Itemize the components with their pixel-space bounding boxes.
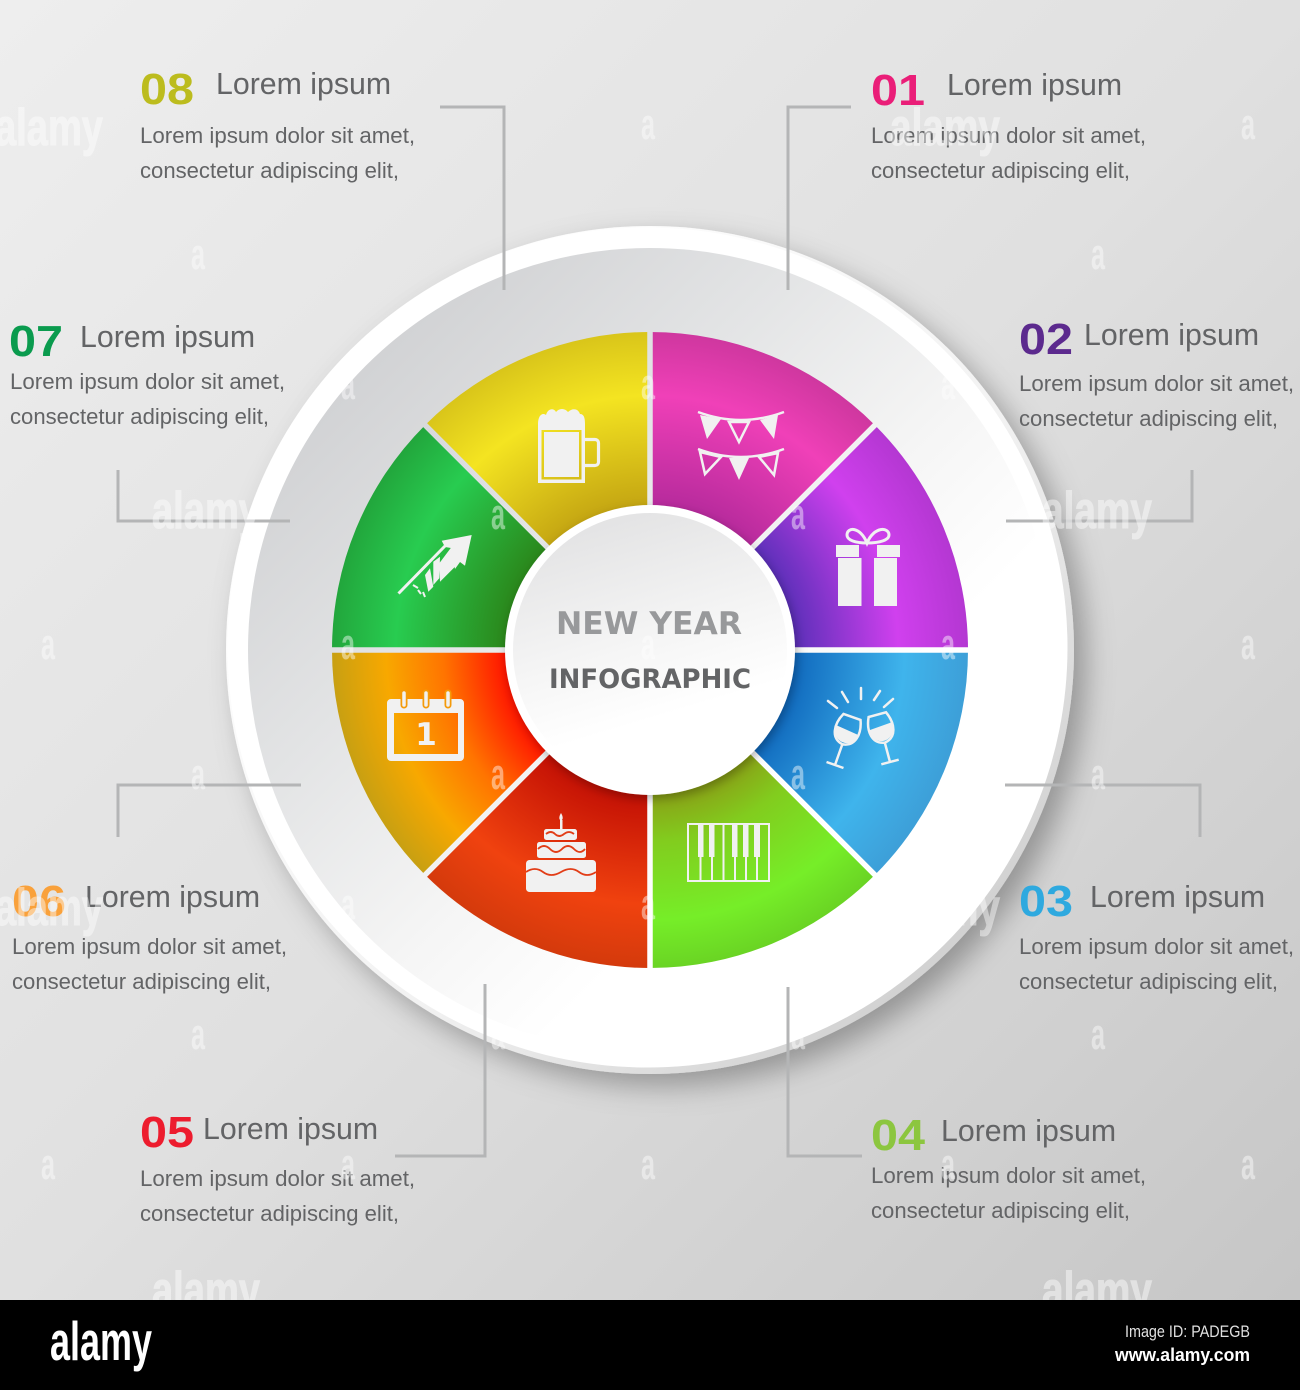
text block 08: Lorem ipsum dolor sit amet, (140, 123, 415, 148)
text block 01: 01 (871, 66, 925, 115)
text block 08: Lorem ipsum (216, 68, 391, 101)
icon: layered cake (526, 813, 596, 892)
watermarks: a (641, 880, 655, 929)
watermarks: a (191, 230, 205, 279)
text block 04: Lorem ipsum (941, 1115, 1116, 1148)
watermarks: a (1091, 750, 1105, 799)
segment 07 green (332, 427, 546, 648)
text block 06: Lorem ipsum (85, 881, 260, 914)
watermarks: alamy (890, 879, 1000, 937)
icon: wine glasses toasting (823, 688, 902, 769)
text block 02: Lorem ipsum dolor sit amet, (1019, 371, 1294, 396)
footer bar (0, 1300, 1300, 1390)
subtitle: INFOGRAPHIC (549, 664, 751, 695)
segment 03 blue (754, 652, 968, 873)
text block 07: 07 (9, 317, 63, 366)
icon: firework rocket (398, 535, 472, 597)
text block 05: Lorem ipsum (203, 1113, 378, 1146)
watermarks: alamy (890, 99, 1000, 157)
text block 04: Lorem ipsum dolor sit amet, (871, 1163, 1146, 1188)
text block 01 (871, 66, 1146, 183)
connector lines (118, 107, 1200, 1156)
segment 04 lime (652, 754, 873, 968)
text block 04 (871, 1111, 1146, 1223)
text block 05 (140, 1108, 415, 1226)
watermarks: alamy (152, 1262, 260, 1320)
watermarks: a (41, 620, 55, 669)
segment 05 red (425, 650, 650, 968)
centre hub (505, 505, 795, 795)
text block 03: consectetur adipiscing elit, (1019, 969, 1278, 994)
text block 07: Lorem ipsum dolor sit amet, (10, 369, 285, 394)
text block 08: consectetur adipiscing elit, (140, 158, 399, 183)
watermarks: a (1241, 620, 1255, 669)
text block 06 (12, 877, 287, 994)
icon: beer mug (538, 409, 598, 483)
icon: calendar: 1 (415, 717, 437, 753)
watermarks: a (1241, 100, 1255, 149)
text block 04: consectetur adipiscing elit, (871, 1198, 1130, 1223)
text block 03 (1019, 877, 1294, 994)
text block 05: consectetur adipiscing elit, (140, 1201, 399, 1226)
icon: piano keys (688, 824, 769, 881)
watermarks: a (41, 1140, 55, 1189)
text block 03: Lorem ipsum (1090, 881, 1265, 914)
text block 04: 04 (871, 1111, 926, 1160)
watermarks: a (491, 750, 505, 799)
text block 08 (140, 65, 415, 183)
text block 01: Lorem ipsum (947, 69, 1122, 102)
watermarks: a (941, 1140, 955, 1189)
watermarks: a (1091, 1010, 1105, 1059)
watermarks: a (191, 1010, 205, 1059)
white ring face (228, 228, 1068, 1068)
title: NEW YEAR (556, 606, 742, 642)
icon: bunting flags (698, 412, 784, 480)
footer logo: alamy (50, 1310, 152, 1372)
segment 06 orange (332, 652, 546, 873)
watermarks: a (1091, 230, 1105, 279)
watermarks: a (491, 1010, 505, 1059)
text block 02 (1019, 315, 1294, 431)
text block 08: 08 (140, 65, 194, 114)
text block 03: Lorem ipsum dolor sit amet, (1019, 934, 1294, 959)
text block 02: consectetur adipiscing elit, (1019, 406, 1278, 431)
website: www.alamy.com (1114, 1345, 1250, 1365)
text block 06: 06 (12, 877, 66, 926)
text block 05: 05 (140, 1108, 194, 1157)
text block 01: consectetur adipiscing elit, (871, 158, 1130, 183)
watermarks: a (641, 100, 655, 149)
text block 07 (9, 317, 285, 429)
watermarks: a (641, 360, 655, 409)
text block 01: Lorem ipsum dolor sit amet, (871, 123, 1146, 148)
segment 01 magenta (652, 332, 873, 546)
hub inner face (513, 513, 787, 787)
watermarks: a (791, 750, 805, 799)
watermarks: a (791, 490, 805, 539)
icon: gift box (836, 529, 900, 606)
watermarks: a (641, 620, 655, 669)
inner disc (248, 248, 1052, 1052)
wheel of eight segments (332, 332, 968, 968)
text block 07: consectetur adipiscing elit, (10, 404, 269, 429)
text block 06: Lorem ipsum dolor sit amet, (12, 934, 287, 959)
watermarks: a (1241, 1140, 1255, 1189)
watermarks: a (341, 620, 355, 669)
segment 08 yellow (427, 332, 648, 546)
text block 03: 03 (1019, 877, 1073, 926)
watermarks: a (491, 490, 505, 539)
icon: calendar (387, 693, 464, 761)
watermarks: alamy (1042, 1262, 1152, 1320)
text block 07: Lorem ipsum (80, 321, 255, 354)
watermarks: a (191, 750, 205, 799)
outer ring bevel (226, 226, 1074, 1074)
text block 02: 02 (1019, 315, 1073, 364)
segment 02 purple (754, 427, 968, 648)
watermarks: a (341, 360, 355, 409)
text block 06: consectetur adipiscing elit, (12, 969, 271, 994)
image id: Image ID: PADEGB (1125, 1322, 1250, 1341)
watermarks: a (941, 360, 955, 409)
watermarks: a (641, 1140, 655, 1189)
text block 05: Lorem ipsum dolor sit amet, (140, 1166, 415, 1191)
watermarks: a (941, 620, 955, 669)
watermarks: a (341, 1140, 355, 1189)
watermarks: alamy (1042, 482, 1152, 540)
watermarks: a (341, 880, 355, 929)
watermarks: a (791, 1010, 805, 1059)
text block 02: Lorem ipsum (1084, 319, 1259, 352)
watermarks: alamy (152, 482, 260, 540)
